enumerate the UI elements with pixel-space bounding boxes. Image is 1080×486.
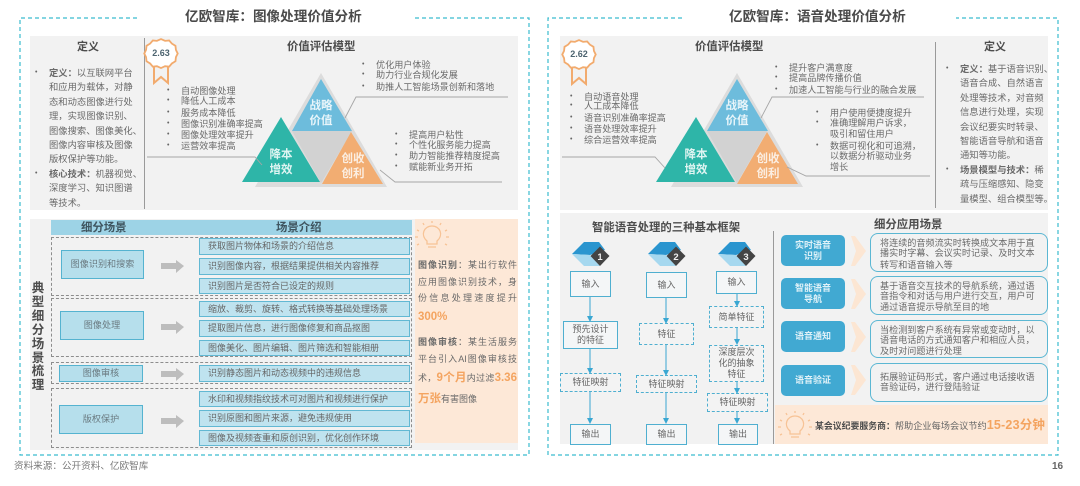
card: navigation [870, 276, 1048, 315]
flow 2 feature: 特征 [657, 328, 676, 338]
flow 2 feature [639, 323, 694, 345]
leader lines left [147, 96, 508, 182]
card: navigation: 基于语音交互技术的导航系统，通过语 [880, 281, 1035, 291]
flow 2 output: 输出 [657, 429, 676, 439]
list: cost benefits right: 自动语音处理 [584, 92, 639, 102]
vertical label: 典 [32, 281, 44, 295]
triangle: cost reduction: 降本 [270, 147, 293, 161]
chart: value triangle left [242, 74, 387, 187]
triangle: cost reduction [242, 117, 320, 182]
flow 3 deep: 特征 [727, 369, 746, 379]
item: 识别原图和图片来源，避免违规使用 [208, 413, 352, 423]
triangle: strategic value: 价值 [310, 113, 333, 127]
text: case image recognition: 300% [418, 311, 447, 323]
flow 3 deep: 化的抽象 [718, 358, 754, 368]
list: cost benefits left [167, 86, 263, 151]
triangle: revenue: 创收 [342, 151, 365, 165]
item: 识别静态图片和动态视频中的违规信息 [208, 368, 361, 378]
heading: definition right: 定义 [984, 41, 1006, 53]
box: copyright [59, 405, 143, 434]
flow 1 mapping: 特征映射 [572, 377, 608, 387]
button: navigation: 智能语音 [795, 282, 831, 292]
icon: bulb [778, 411, 812, 438]
item: 图像美化、图片编辑、图片筛选和智能相册 [208, 343, 379, 353]
list: strategic right: 提高品牌传播价值 [789, 73, 862, 83]
list: cost benefits right: 语音识别准确率提高 [584, 113, 666, 123]
title: speech processing: 亿欧智库：语音处理价值分析 [729, 9, 906, 24]
item: 识别图片是否符合已设定的规则 [208, 281, 334, 291]
list: revenue right: 准确理解用户诉求， [830, 118, 912, 128]
list: revenue left: 赋能新业务开拓 [409, 162, 473, 172]
icon: rosette 2.62 [561, 39, 597, 86]
button: realtime: 识别 [804, 250, 822, 260]
text block: definition right: 场景模型与技术：稀 [960, 165, 1044, 175]
vertical label: 场 [32, 337, 44, 351]
list: cost benefits right: 综合运营效率提高 [584, 135, 657, 145]
icon: bulb left [415, 221, 449, 248]
triangle: strategic value: 战略 [310, 98, 333, 112]
box: recognition [61, 250, 144, 279]
list: revenue left [395, 130, 500, 172]
list: revenue right: 用户使用便捷度提升 [830, 108, 912, 118]
text block: definition left [35, 68, 142, 208]
card: realtime: 将连续的音频流实时转换成文本用于直 [880, 238, 1035, 248]
triangle: revenue: 创利 [342, 166, 364, 180]
flow 2 output [646, 424, 687, 445]
text block: definition left: 图像内容审核及图像 [49, 140, 133, 150]
list: strategic left: 助力行业合规化发展 [376, 70, 458, 80]
heading: value model right: 价值评估模型 [695, 41, 763, 53]
item: 获取图片物体和场景的介绍信息 [208, 241, 334, 251]
card: verify: 音验证码，进行登陆验证 [880, 382, 980, 392]
text: case image recognition [418, 260, 517, 323]
group: image audit [51, 362, 412, 384]
card: verify [870, 363, 1048, 402]
button: notice: 语音通知 [795, 331, 831, 341]
item [199, 258, 410, 275]
box: recognition: 图像识别和搜索 [71, 259, 134, 269]
flow 1 designed feature: 的特征 [577, 335, 604, 345]
button: navigation: 导航 [804, 294, 822, 304]
list: strategic right: 提升客户满意度 [789, 63, 853, 73]
text block: definition right: 处理等技术，对音频 [960, 93, 1044, 103]
heading: table column intro: 场景介绍 [276, 222, 322, 234]
triangle: cost reduction: 降本 [684, 147, 708, 161]
icon: cube 2: 2 [673, 252, 679, 263]
text: case image recognition: 图像识别：某出行软件 [418, 260, 517, 270]
flow 2 mapping [636, 375, 697, 393]
panel: cases [415, 219, 518, 450]
card: verify: 拓展验证码形式，客户通过电话接收语 [880, 372, 1035, 382]
text: case image audit: 平台引入AI图像审核技 [418, 354, 517, 364]
list: strategic left: 优化用户体验 [376, 60, 431, 70]
heading: definition left: 定义 [77, 41, 99, 53]
card: realtime [870, 233, 1048, 272]
source: 资料来源：公开资料、亿欧智库 [14, 461, 148, 472]
list: cost benefits left: 服务成本降低 [181, 108, 236, 118]
triangle: revenue: 创利 [756, 166, 780, 180]
item [199, 340, 410, 356]
flow 1 input [570, 271, 611, 297]
item: 缩放、裁剪、旋转、格式转换等基础处理场景 [208, 304, 388, 314]
flow 1 input: 输入 [581, 278, 600, 288]
list: revenue left: 个性化服务能力提高 [409, 140, 491, 150]
item: 识别图像内容，根据结果提供相关内容推荐 [208, 261, 379, 271]
header bar [51, 220, 412, 235]
heading: sub scenes: 细分应用场景 [874, 219, 942, 231]
item [199, 391, 410, 407]
icon: cube 1: 1 [597, 252, 603, 263]
text block: definition right: 量模型、组合模型等。 [960, 194, 1053, 204]
card: notice: 当检测到客户系统有异常或变动时，以 [880, 325, 1035, 335]
flow 3 output: 输出 [729, 429, 747, 439]
item: 提取图片信息，进行图像修复和商品抠图 [208, 323, 370, 333]
list: revenue right: 数据可视化和可追溯， [830, 141, 921, 151]
triangle: cost reduction: 增效 [684, 162, 708, 176]
panel: speech value top [560, 36, 1048, 210]
card: realtime: 播实时字幕、会议实时记录、及时文本 [880, 248, 1035, 258]
text block: definition left: 版权保护等功能。 深度学习、知识图谱 [49, 154, 133, 193]
divider [144, 38, 145, 209]
list: cost benefits left: 图像识别准确率提高 [181, 119, 263, 129]
title: image processing: 亿欧智库：图像处理价值分析 [185, 9, 362, 24]
item [199, 410, 410, 427]
arrows [161, 260, 184, 428]
card: notice: 及时对问题进行处理 [880, 346, 962, 356]
divider [773, 231, 774, 444]
list: strategic right [775, 63, 916, 95]
text: case image audit: 万张有害图像 [418, 393, 477, 405]
item: 水印和视频指纹技术可对图片和视频进行保护 [208, 394, 388, 404]
group: image recognition [51, 237, 412, 296]
icon: cube 2 [648, 242, 686, 266]
vertical label: 梳 [32, 364, 44, 378]
text block: definition left: 态和动态图像进行处 [49, 97, 133, 107]
group: copyright [51, 388, 412, 448]
triangle: strategic value [707, 79, 768, 131]
box: copyright: 版权保护 [83, 414, 119, 424]
flow arrows [587, 294, 740, 424]
card: notice: 语音电话的方式通知客户和相应人员， [880, 335, 1035, 345]
box: processing: 图像处理 [84, 320, 120, 330]
divider [935, 42, 936, 208]
item [199, 301, 410, 317]
triangle: strategic value [292, 79, 352, 131]
flow 1 designed feature: 预先设计 [572, 324, 608, 334]
flow 1 designed feature [563, 321, 618, 349]
box: audit [59, 365, 143, 382]
heading: frameworks: 智能语音处理的三种基本框架 [592, 222, 740, 234]
text: case image audit: 图像审核：某生活服务 [418, 337, 517, 347]
icon: rosette 2.62: 2.62 [570, 49, 588, 59]
button: realtime [781, 235, 845, 266]
flow 3 input [716, 271, 757, 294]
triangle: revenue [737, 132, 798, 184]
text block: definition right: 信息进行处理，实现 [960, 107, 1044, 117]
flow 2 mapping: 特征映射 [648, 378, 684, 388]
list: cost benefits left: 降低人工成本 [181, 96, 236, 106]
flow 3 deep [709, 345, 764, 382]
icon: cube 1 [572, 242, 610, 266]
text: 某会议纪要服务商：帮助企业每场会议节约15-23分钟 [815, 418, 1045, 432]
flow 1 output: 输出 [581, 429, 600, 439]
vertical label [32, 281, 44, 392]
flow 2 input: 输入 [657, 280, 676, 290]
card: notice [870, 320, 1048, 358]
list: strategic left [362, 60, 494, 92]
card: navigation: 音指令和对话与用户进行交互，用户可 [880, 291, 1035, 301]
text: case image recognition: 应用图像识别技术，身 [418, 277, 517, 287]
list: revenue right: 增长 [830, 162, 848, 172]
vertical label: 分 [32, 323, 44, 337]
text: case image recognition: 份信息处理速度提升 [418, 293, 517, 303]
page number: 16 [1052, 461, 1063, 472]
flow 3 mapping [707, 393, 768, 412]
triangle: strategic value: 战略 [726, 98, 749, 112]
button: navigation [781, 278, 845, 309]
flow 2 input [646, 272, 687, 298]
flow 3 input: 输入 [727, 277, 746, 287]
flow 3 simple [709, 306, 764, 328]
panel: image value top [30, 36, 518, 210]
triangle: revenue [322, 132, 383, 184]
box: audit: 图像审核 [83, 368, 119, 378]
text block: definition left: 和应用为载体，对静 [49, 82, 133, 92]
panel: speech lower [560, 213, 1048, 444]
box: processing [60, 311, 144, 340]
list: cost benefits left: 运营效率提高 [181, 141, 236, 151]
flow 3 mapping: 特征映射 [719, 397, 756, 407]
flow 3 simple: 简单特征 [718, 312, 754, 322]
callout: meeting [775, 405, 1048, 444]
text block: definition right: 定义：基于语音识别、 [960, 64, 1053, 74]
flow 3 deep: 深度层次 [718, 347, 754, 357]
card: realtime: 转写和语音输入等 [880, 260, 953, 270]
vertical label: 理 [32, 378, 44, 392]
item: 图像及视频查重和原创识别，优化创作环境 [208, 433, 379, 443]
text block: definition left: 等技术。 [49, 198, 86, 208]
text block: definition right: 智能语音导航和语音 [960, 136, 1044, 146]
flow 1 mapping [560, 373, 621, 392]
icon: cube 3: 3 [743, 252, 749, 263]
list: cost benefits right: 语音处理效率提升 [584, 124, 657, 134]
list: cost benefits left: 图像处理效率提升 [181, 130, 254, 140]
vertical label: 型 [32, 295, 44, 309]
list: cost benefits right [570, 92, 666, 145]
flow 1 output [570, 424, 611, 445]
vertical label: 景 [32, 351, 44, 365]
list: cost benefits right: 人工成本降低 [584, 101, 639, 111]
text block: definition left: 理，实现图像识别、 [49, 111, 133, 121]
flow 3 output [718, 424, 758, 445]
item [199, 320, 410, 337]
list: strategic left: 助推人工智能场景创新和落地 [376, 82, 494, 92]
text block: definition right [946, 64, 1053, 204]
icon: cube 3 [718, 242, 756, 266]
chart: value triangle right [656, 74, 803, 187]
leader lines right [562, 96, 930, 176]
panel: scene table [30, 219, 415, 450]
text: case image audit [418, 336, 517, 405]
vertical label: 细 [32, 309, 44, 323]
button: notice [781, 321, 845, 352]
triangle: cost reduction: 增效 [270, 162, 293, 176]
card: navigation: 通过语音提示导航至目的地 [880, 302, 989, 312]
icon: rosette 2.63: 2.63 [152, 48, 170, 58]
button: realtime: 实时语音 [795, 240, 831, 250]
text block: definition right: 会议纪要实时转录、 [960, 122, 1044, 132]
list: revenue right [816, 108, 921, 172]
button: verify: 语音验证 [795, 375, 831, 385]
list: revenue left: 提高用户粘性 [409, 130, 464, 140]
item [199, 365, 410, 382]
item [199, 278, 410, 294]
text block: definition right: 语音合成、自然语言 [960, 78, 1044, 88]
chevrons [851, 236, 866, 395]
triangle: cost reduction [656, 117, 735, 182]
text block: definition left: 定义：以互联网平台 [49, 68, 133, 78]
icon: rosette 2.63 [143, 38, 179, 85]
text block: definition right: 通知等功能。 疏与压缩感知、隐变 [960, 150, 1044, 189]
heading: table column scenes: 细分场景 [81, 222, 127, 234]
list: cost benefits left: 自动图像处理 [181, 86, 236, 96]
list: revenue right: 吸引和留住用户 [830, 129, 894, 139]
text block: definition left: 图像搜索、图像美化、 [49, 126, 142, 136]
item [199, 238, 410, 255]
group: image processing [51, 298, 412, 357]
text: case image audit: 术，9个月内过滤3.36 [418, 372, 517, 384]
item [199, 430, 410, 446]
triangle: revenue: 创收 [756, 151, 780, 165]
list: strategic right: 加速人工智能与行业的融合发展 [789, 85, 916, 95]
list: revenue left: 助力智能推荐精度提高 [409, 151, 500, 161]
text block: definition left: 核心技术：机器视觉、 [49, 169, 142, 179]
triangle: strategic value: 价值 [726, 113, 749, 127]
list: revenue right: 以数据分析驱动业务 [830, 151, 912, 161]
button: verify [781, 365, 845, 396]
heading: value model left: 价值评估模型 [287, 41, 355, 53]
